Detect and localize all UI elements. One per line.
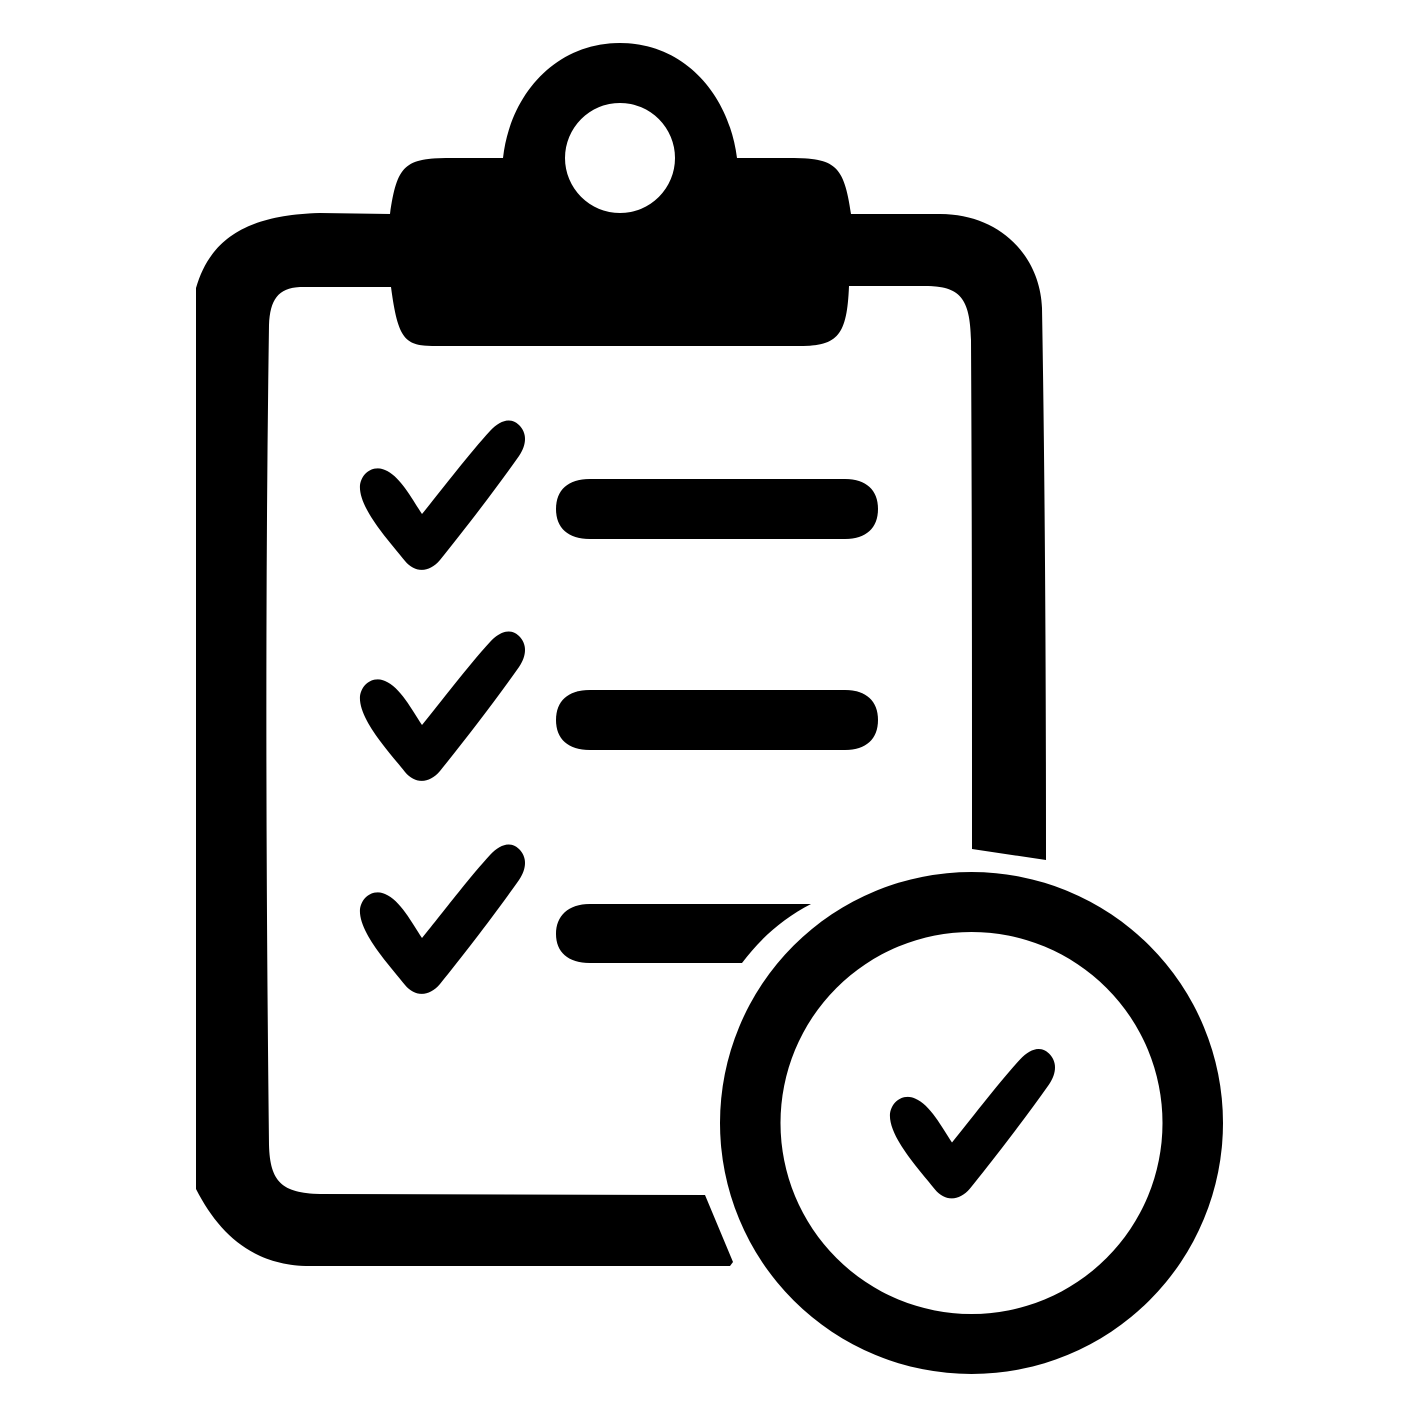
checklist row 2 bbox=[360, 631, 878, 781]
checklist row 1 bbox=[360, 420, 878, 570]
approval badge ring bbox=[720, 872, 1223, 1374]
clipboard clip bbox=[390, 43, 851, 346]
checklist row 3 bbox=[360, 844, 811, 994]
badge check mark bbox=[890, 1049, 1055, 1198]
clipboard board outline bbox=[196, 213, 1046, 1266]
